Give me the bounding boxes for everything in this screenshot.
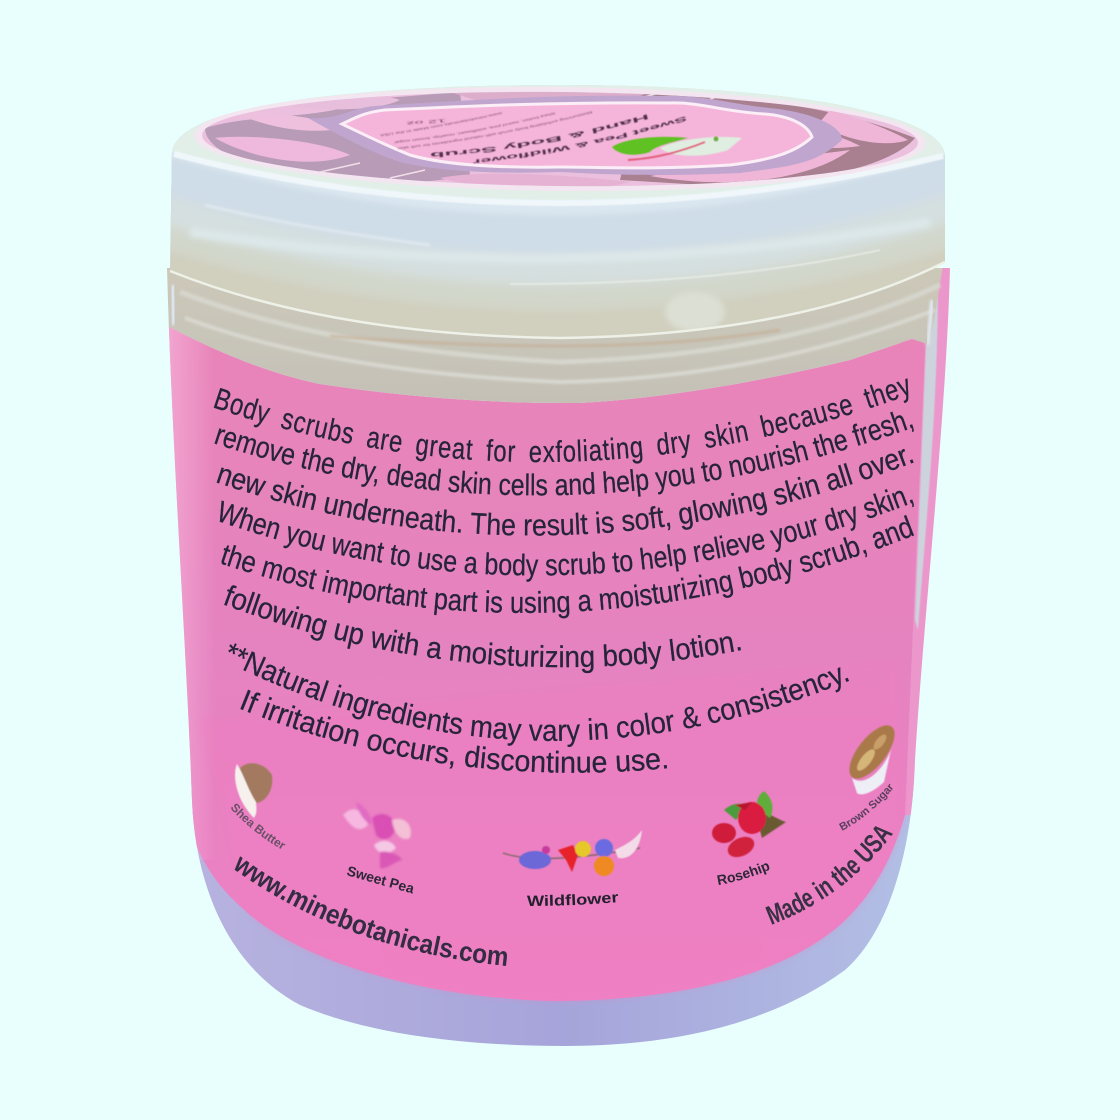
ingredient: rosehip: [711, 790, 786, 885]
paragraph: body scrub description: the most important part is using a moisturizing body scrub, and: [221, 514, 914, 618]
sticker white border: [193, 83, 927, 195]
label body copy: [214, 378, 914, 773]
sticker upside-down text: Sweet Pea & Wildflower: [473, 116, 686, 164]
made in the USA: Made in the USA: [765, 826, 893, 925]
ingredient: brown sugar: [839, 724, 896, 831]
ingredient: sweet pea: [342, 802, 414, 894]
sticker logo: [612, 136, 742, 160]
paragraph: body scrub description: remove the dry, dead skin cells and help you to nourish the fresh,: [214, 412, 914, 497]
neck of jar: [160, 265, 943, 403]
paragraph: body scrub description: following up with a moisturizing body lotion.: [224, 585, 741, 674]
soft highlight on label left edge: [168, 322, 204, 860]
jar body: [160, 265, 960, 1060]
jar lid: [170, 85, 946, 348]
sticker base: [202, 88, 918, 190]
ingredient: sweet pea: Sweet Pea: [347, 866, 414, 894]
sticker upside-down text: [380, 110, 686, 164]
icon: wildflower bouquet: [503, 830, 642, 876]
paragraph: body scrub description: When you want to use a body scrub to help relieve your dry skin,: [220, 489, 914, 582]
ingredient: rosehip: Rosehip: [717, 863, 770, 885]
lavender jar base: [191, 780, 914, 1046]
pink wraparound label: [160, 322, 925, 1001]
lid sticker: [194, 87, 926, 191]
lid band highlight: [190, 222, 930, 259]
sticker upside-down text: www.minebotanicals.com Made in the USA: [380, 112, 502, 137]
pink refraction strip on the right: [900, 265, 955, 815]
brighter hip of the label: [252, 815, 906, 1002]
lid side edges: [172, 160, 176, 265]
lid left ledge: [205, 205, 430, 245]
paragraph: body scrub description: new skin underneath. The result is soft, glowing skin all over.: [216, 448, 914, 536]
icon: bowl of brown sugar: [841, 718, 903, 794]
sticker pink panel: [342, 103, 812, 168]
sticker upside-down text: Hand & Body Scrub: [430, 114, 648, 158]
sticker upside-down text: 12 oz: [406, 118, 445, 125]
sticker ornament: [205, 91, 915, 190]
rim bright edge: [174, 154, 943, 203]
ingredient: shea butter: [231, 762, 286, 849]
lid top rim: [172, 85, 945, 200]
sticker upside-down text: Shea butter, sweet pea, wildflower, rosehip, brown sugar: [394, 112, 556, 144]
ingredient: shea butter: Shea Butter: [231, 804, 286, 849]
ingredient: wildflower: Wildflower: [527, 894, 618, 906]
translucent lid side: [170, 85, 945, 336]
sticker cartouche border: [308, 96, 842, 175]
warm scrub line under lid: [330, 330, 780, 346]
sticker upside-down text: Moisturizing exfoliating body scrub with natural ingredients for soft skin: [398, 110, 592, 150]
ingredient: wildflower: [502, 830, 642, 906]
neck ridges: [185, 310, 935, 382]
icon: rosehip berries: [712, 791, 786, 861]
scrub blob: [665, 292, 725, 332]
dotted highlight: [510, 250, 880, 284]
website: www.minebotanicals.com: [234, 856, 507, 966]
paragraph: body scrub description: Body scrubs are great for exfoliating dry skin because they: [214, 378, 908, 464]
lid bottom bright line: [170, 262, 945, 338]
product photo: jar of body scrub: [167, 85, 950, 1046]
icon: shea nut: [235, 763, 272, 818]
ingredient: brown sugar: Brown Sugar: [839, 784, 893, 831]
note: natural ingredients: **Natural ingredients may vary in color & consistency.: [228, 643, 849, 747]
grey strip beside label: [915, 290, 938, 630]
icon: sweet pea flower: [343, 802, 411, 868]
neck edge glints: [172, 285, 174, 325]
note: natural ingredients: If irritation occurs, discontinue use.: [240, 690, 668, 773]
paragraph: body scrub description: [214, 378, 914, 674]
